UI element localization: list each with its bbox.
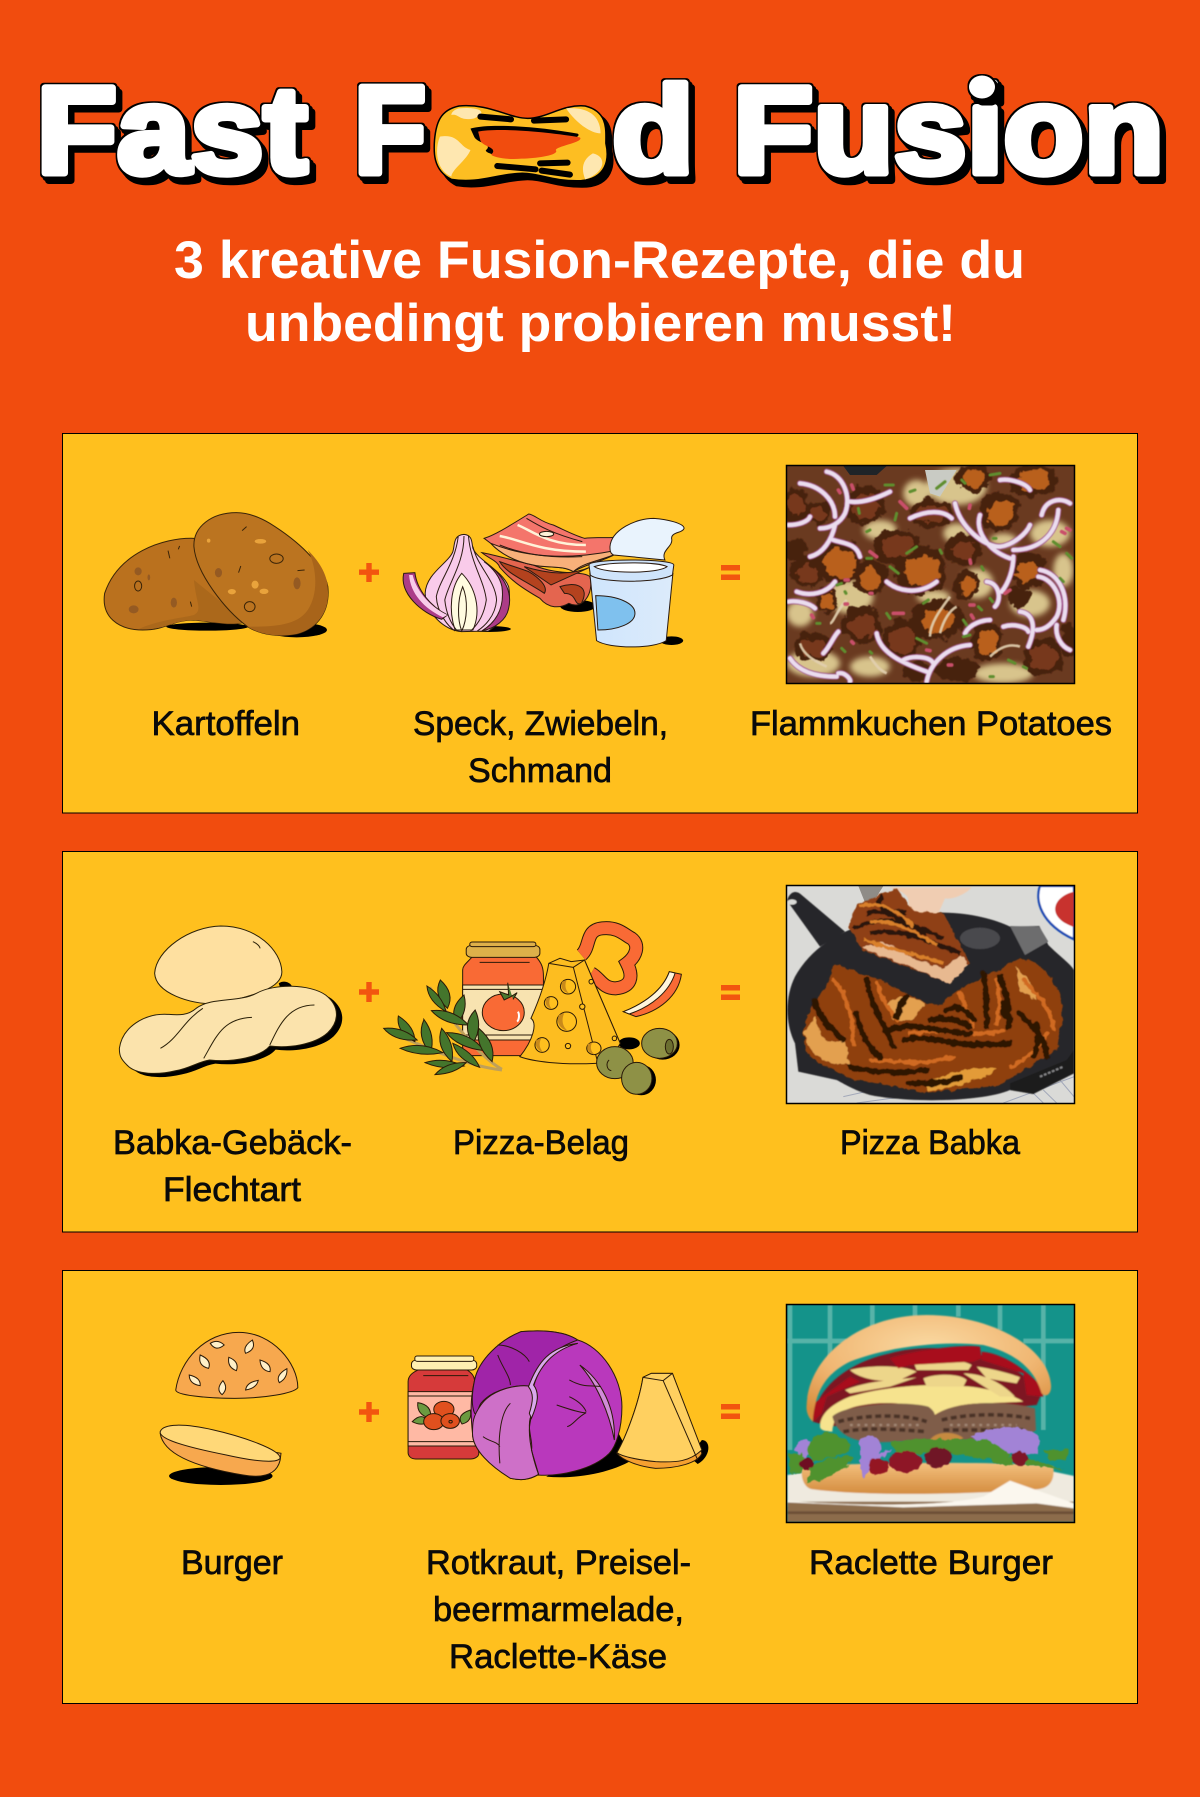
subtitle: 3 kreative Fusion-Rezepte, die du bbox=[174, 231, 1025, 290]
label: Kartoffeln: Kartoffeln bbox=[152, 705, 300, 743]
icon: stretchy double-o pastry in the title bbox=[434, 106, 613, 187]
title: Fusion bbox=[733, 62, 1164, 200]
subtitle: unbedingt probieren musst! bbox=[245, 294, 956, 353]
label: Burger: Burger bbox=[181, 1544, 283, 1582]
icon: sauce jar bbox=[463, 942, 543, 1056]
icon: babka dough bbox=[119, 926, 342, 1077]
icon: burger bun bbox=[160, 1332, 298, 1485]
label: Pizza-Belag: Pizza-Belag bbox=[453, 1124, 629, 1162]
icon: cranberry jam jar bbox=[408, 1356, 479, 1459]
title bbox=[36, 62, 1164, 200]
title: d bbox=[612, 62, 694, 200]
label: Rotkraut, Preiselbeermarmelade, Raclette-Käse bbox=[426, 1544, 691, 1676]
photo: Raclette Burger bbox=[786, 1304, 1074, 1522]
icon: cheese wedge bbox=[520, 958, 640, 1064]
icon: sour cream tub bbox=[589, 518, 684, 647]
label: Babka-Gebäck-Flechtart: Flechtart bbox=[163, 1171, 302, 1209]
title: F bbox=[354, 62, 426, 200]
icon: raclette cheese bbox=[546, 1373, 708, 1477]
symbol: plus bbox=[359, 563, 379, 582]
label: Babka-Gebäck-Flechtart: Babka-Gebäck- bbox=[113, 1124, 352, 1162]
label: Flammkuchen Potatoes: Flammkuchen Potatoes bbox=[750, 705, 1112, 743]
icon: onion bbox=[403, 534, 511, 632]
subtitle bbox=[174, 231, 1025, 353]
icon: i dot bbox=[969, 76, 995, 98]
icon: pepper ring bbox=[581, 928, 636, 988]
label: Rotkraut, Preiselbeermarmelade, Raclette-Käse: beermarmelade, bbox=[433, 1591, 684, 1629]
title: Fast bbox=[36, 62, 308, 200]
symbol: plus bbox=[359, 1402, 379, 1422]
icon: onion, bacon, sour cream bbox=[403, 514, 684, 647]
label: Speck, Zwiebeln, Schmand bbox=[413, 705, 668, 790]
label: Speck, Zwiebeln, Schmand: Speck, Zwiebeln, bbox=[413, 705, 668, 743]
photo frame bbox=[786, 466, 1074, 684]
icon: pizza toppings bbox=[384, 928, 681, 1095]
icon: olives bbox=[597, 1028, 680, 1095]
panel: Flammkuchen Potatoes bbox=[62, 434, 1138, 813]
icon: potatoes bbox=[104, 513, 328, 637]
symbol: plus bbox=[359, 982, 379, 1002]
label: Raclette Burger: Raclette Burger bbox=[809, 1544, 1053, 1582]
icon: red cabbage bbox=[471, 1331, 622, 1480]
panel: Raclette Burger bbox=[62, 1270, 1138, 1704]
symbol: equals bbox=[721, 1404, 740, 1419]
panel: Pizza Babka bbox=[62, 852, 1138, 1232]
symbol: equals bbox=[721, 565, 740, 580]
photo frame bbox=[786, 886, 1074, 1104]
label: Pizza Babka: Pizza Babka bbox=[840, 1124, 1020, 1162]
icon: rosemary sprigs bbox=[384, 980, 502, 1075]
photo frame bbox=[786, 1304, 1074, 1522]
symbol: equals bbox=[721, 985, 740, 1000]
photo: Flammkuchen Potatoes bbox=[782, 463, 1079, 684]
icon: jam, red cabbage, raclette bbox=[408, 1331, 708, 1480]
label: Speck, Zwiebeln, Schmand: Schmand bbox=[468, 752, 612, 790]
label: Rotkraut, Preiselbeermarmelade, Raclette-Käse: Rotkraut, Preisel- bbox=[426, 1544, 691, 1582]
photo: Pizza Babka bbox=[786, 886, 1074, 1104]
label: Babka-Gebäck-Flechtart bbox=[113, 1124, 352, 1209]
label: Rotkraut, Preiselbeermarmelade, Raclette-Käse: Raclette-Käse bbox=[449, 1638, 667, 1676]
icon: pepper strip bbox=[623, 972, 681, 1017]
icon: bacon bbox=[482, 514, 616, 612]
